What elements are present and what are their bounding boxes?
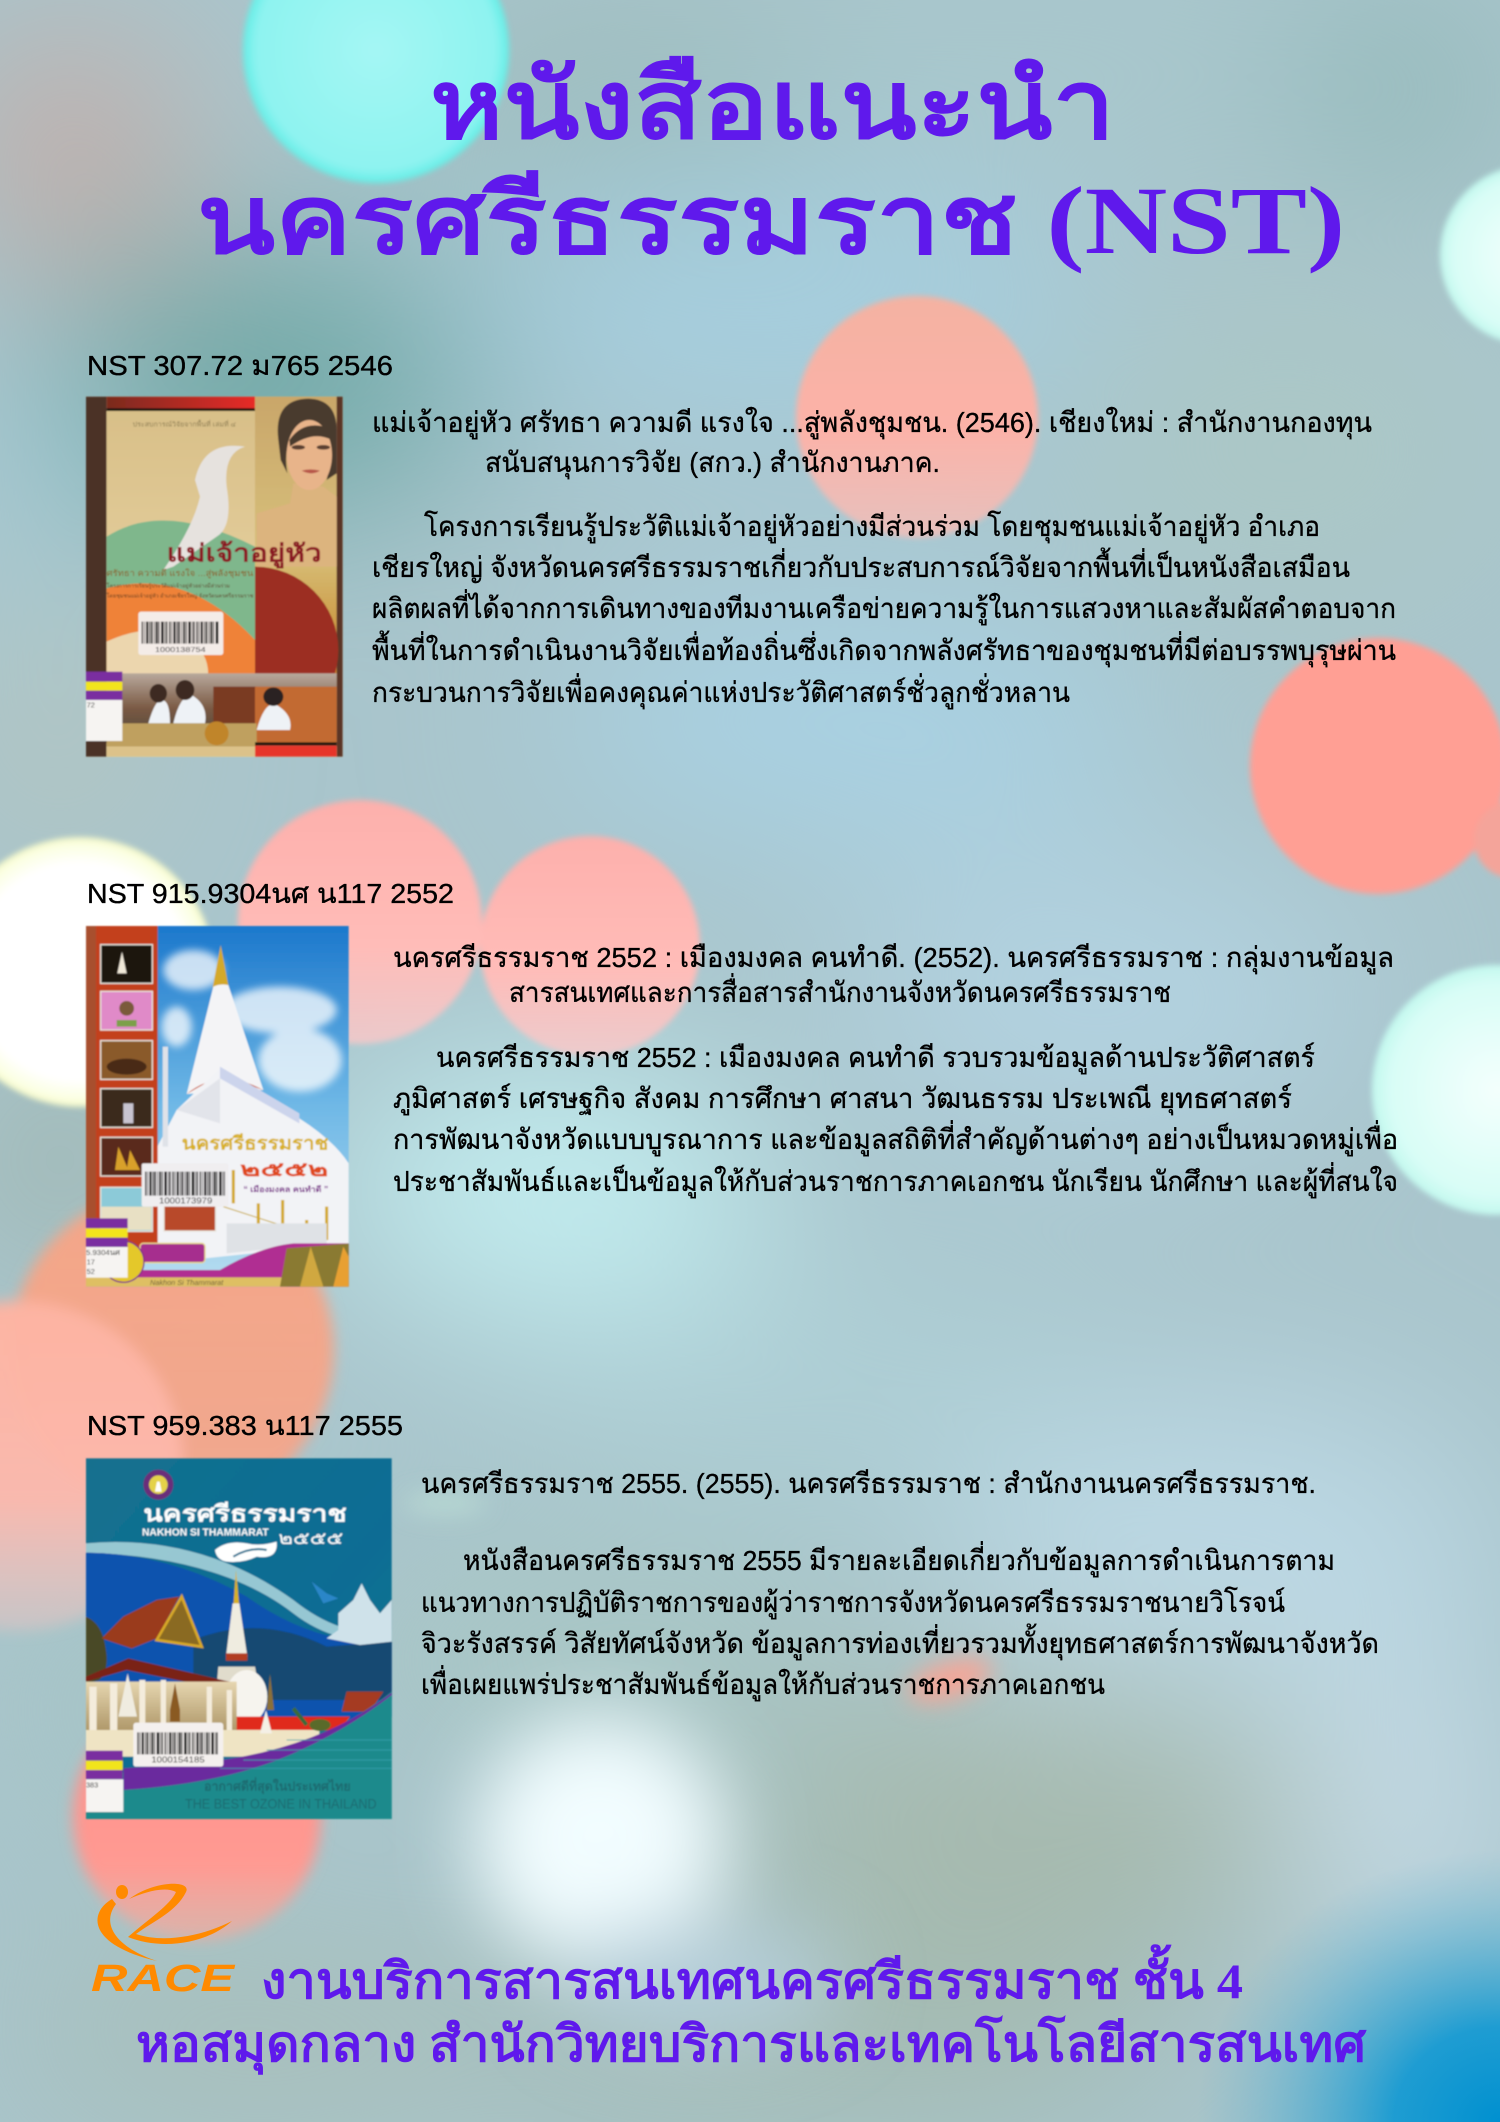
citation 2 [393,942,1394,1008]
description 3: แนวทางการปฏิบัติราชการของผู้ว่าราชการจังหวัดนครศรีธรรมราชนายวิโรจน์ [421,1586,1285,1620]
footer text [136,1944,1367,2075]
description 1: เชียรใหญ่ จังหวัดนครศรีธรรมราชเกี่ยวกับประสบการณ์วิจัยจากพื้นที่เป็นหนังสือเสมือน [372,547,1350,583]
call number 2: NST 915.9304นศ น117 2552 [87,878,454,909]
book cover 3: อากาศดีที่สุดในประเทศไทย [204,1777,351,1795]
book cover 2: 1000173979 [159,1196,213,1205]
citation 1 [372,406,1372,480]
book cover 3: 1000154185 [151,1756,205,1765]
description 1: ผลิตผลที่ได้จากการเดินทางของทีมงานเครือข่ายความรู้ในการแสวงหาและสัมผัสคำตอบจาก [372,589,1396,626]
book cover 2: 5.9304นศ [86,1248,120,1257]
logo: RACE [91,1884,236,2000]
description 1: โครงการเรียนรู้ประวัติแม่เจ้าอยู่หัวอย่างมีส่วนร่วม โดยชุมชนแม่เจ้าอยู่หัว อำเภอ [424,510,1320,544]
book cover 1: 72 [87,700,95,709]
description 3 [421,1541,1379,1702]
description 3: จิวะรังสรรค์ วิสัยทัศน์จังหวัด ข้อมูลการท่องเที่ยวรวมทั้งยุทธศาสตร์การพัฒนาจังหวัด [421,1623,1379,1661]
title: หนังสือแนะนำ [430,52,1115,159]
call number 3: NST 959.383 น117 2555 [87,1410,403,1441]
description 2: นครศรีธรรมราช 2552 : เมืองมงคล คนทำดี รวบรวมข้อมูลด้านประวัติศาสตร์ [436,1042,1315,1075]
description 2: การพัฒนาจังหวัดแบบบูรณาการ และข้อมูลสถิติที่สำคัญด้านต่างๆ อย่างเป็นหมวดหมู่เพื่อ [393,1120,1398,1157]
book cover 2: “ เมืองมงคล คนทำดี ” [243,1184,328,1194]
book cover 1: โครงการการเรียนรู้ประวัติแม่เจ้าอยู่หัวอย่างมีส่วนร่วม [107,582,230,589]
book cover 2: นครศรีธรรมราช [182,1132,329,1153]
title [197,52,1345,274]
book cover 3: นครศรีธรรมราช [143,1501,347,1527]
footer text: งานบริการสารสนเทศนครศรีธรรมราช ชั้น 4 [261,1944,1243,2009]
description 1: พื้นที่ในการดำเนินงานวิจัยเพื่อท้องถิ่นซึ่งเกิดจากพลังศรัทธาของชุมชนที่มีต่อบรรพบุรุษผ่าน [372,630,1396,668]
footer text: หอสมุดกลาง สำนักวิทยบริการและเทคโนโลยีสารสนเทศ [136,2014,1367,2075]
description 1: กระบวนการวิจัยเพื่อคงคุณค่าแห่งประวัติศาสตร์ชั่วลูกชั่วหลาน [372,673,1070,710]
description 2: ภูมิศาสตร์ เศรษฐกิจ สังคม การศึกษา ศาสนา วัฒนธรรม ประเพณี ยุทธศาสตร์ [393,1083,1292,1116]
title: นครศรีธรรมราช (NST) [197,167,1345,274]
book cover 1: แม่เจ้าอยู่หัว [167,540,322,570]
citation 1: สนับสนุนการวิจัย (สกว.) สำนักงานภาค. [485,447,940,480]
citation 1: แม่เจ้าอยู่หัว ศรัทธา ความดี แรงใจ ...สู่พลังชุมชน. (2546). เชียงใหม่ : สำนักงานกองทุน [372,406,1372,440]
book cover 1: ประสบการณ์วิจัยจากพื้นที่ เล่มที่ ๔ [133,420,236,429]
panel: book 2 [86,878,1398,1287]
book cover 2: Nakhon Si Thammarat [150,1278,224,1287]
book cover 3: 383 [86,1780,98,1789]
citation 3: นครศรีธรรมราช 2555. (2555). นครศรีธรรมราช : สำนักงานนครศรีธรรมราช. [421,1468,1316,1499]
description 3: เพื่อเผยแพร่ประชาสัมพันธ์ข้อมูลให้กับส่วนราชการภาคเอกชน [421,1665,1105,1702]
description 3: หนังสือนครศรีธรรมราช 2555 มีรายละเอียดเกี่ยวกับข้อมูลการดำเนินการตาม [463,1541,1335,1578]
book cover 2 [86,926,349,1287]
description 2: ประชาสัมพันธ์และเป็นข้อมูลให้กับส่วนราชการภาคเอกชน นักเรียน นักศึกษา และผู้ที่สนใจ [393,1162,1398,1199]
book cover 3 [86,1458,392,1819]
book cover 1: โดยชุมชนแม่เจ้าอยู่หัว อำเภอเชียรใหญ่ จังหวัดนครศรีธรรมราช [107,593,254,600]
citation 2: นครศรีธรรมราช 2552 : เมืองมงคล คนทำดี. (2552). นครศรีธรรมราช : กลุ่มงานข้อมูล [393,942,1394,975]
description 1 [372,510,1396,710]
book cover 1 [86,397,343,757]
book cover 3: ๒๕๕๕ [278,1528,343,1548]
book cover 3: THE BEST OZONE IN THAILAND [185,1795,377,1811]
description 2 [393,1042,1398,1199]
book cover 2: ๒๕๕๒ [240,1159,328,1181]
book cover 2: 52 [87,1267,95,1276]
panel: book 1 [86,350,1396,757]
book cover 3: NAKHON SI THAMMARAT [142,1527,269,1538]
panel: book 3 [86,1410,1379,1819]
citation 2: สารสนเทศและการสื่อสารสำนักงานจังหวัดนครศรีธรรมราช [509,973,1171,1008]
logo: RACE: RACE [91,1958,236,2000]
book cover 2: 17 [87,1257,95,1266]
call number 1: NST 307.72 ม765 2546 [87,350,393,381]
book cover 1: ศรัทธา ความดี แรงใจ ...สู่พลังชุมชน [107,568,253,579]
book cover 1: 1000138754 [155,645,207,654]
